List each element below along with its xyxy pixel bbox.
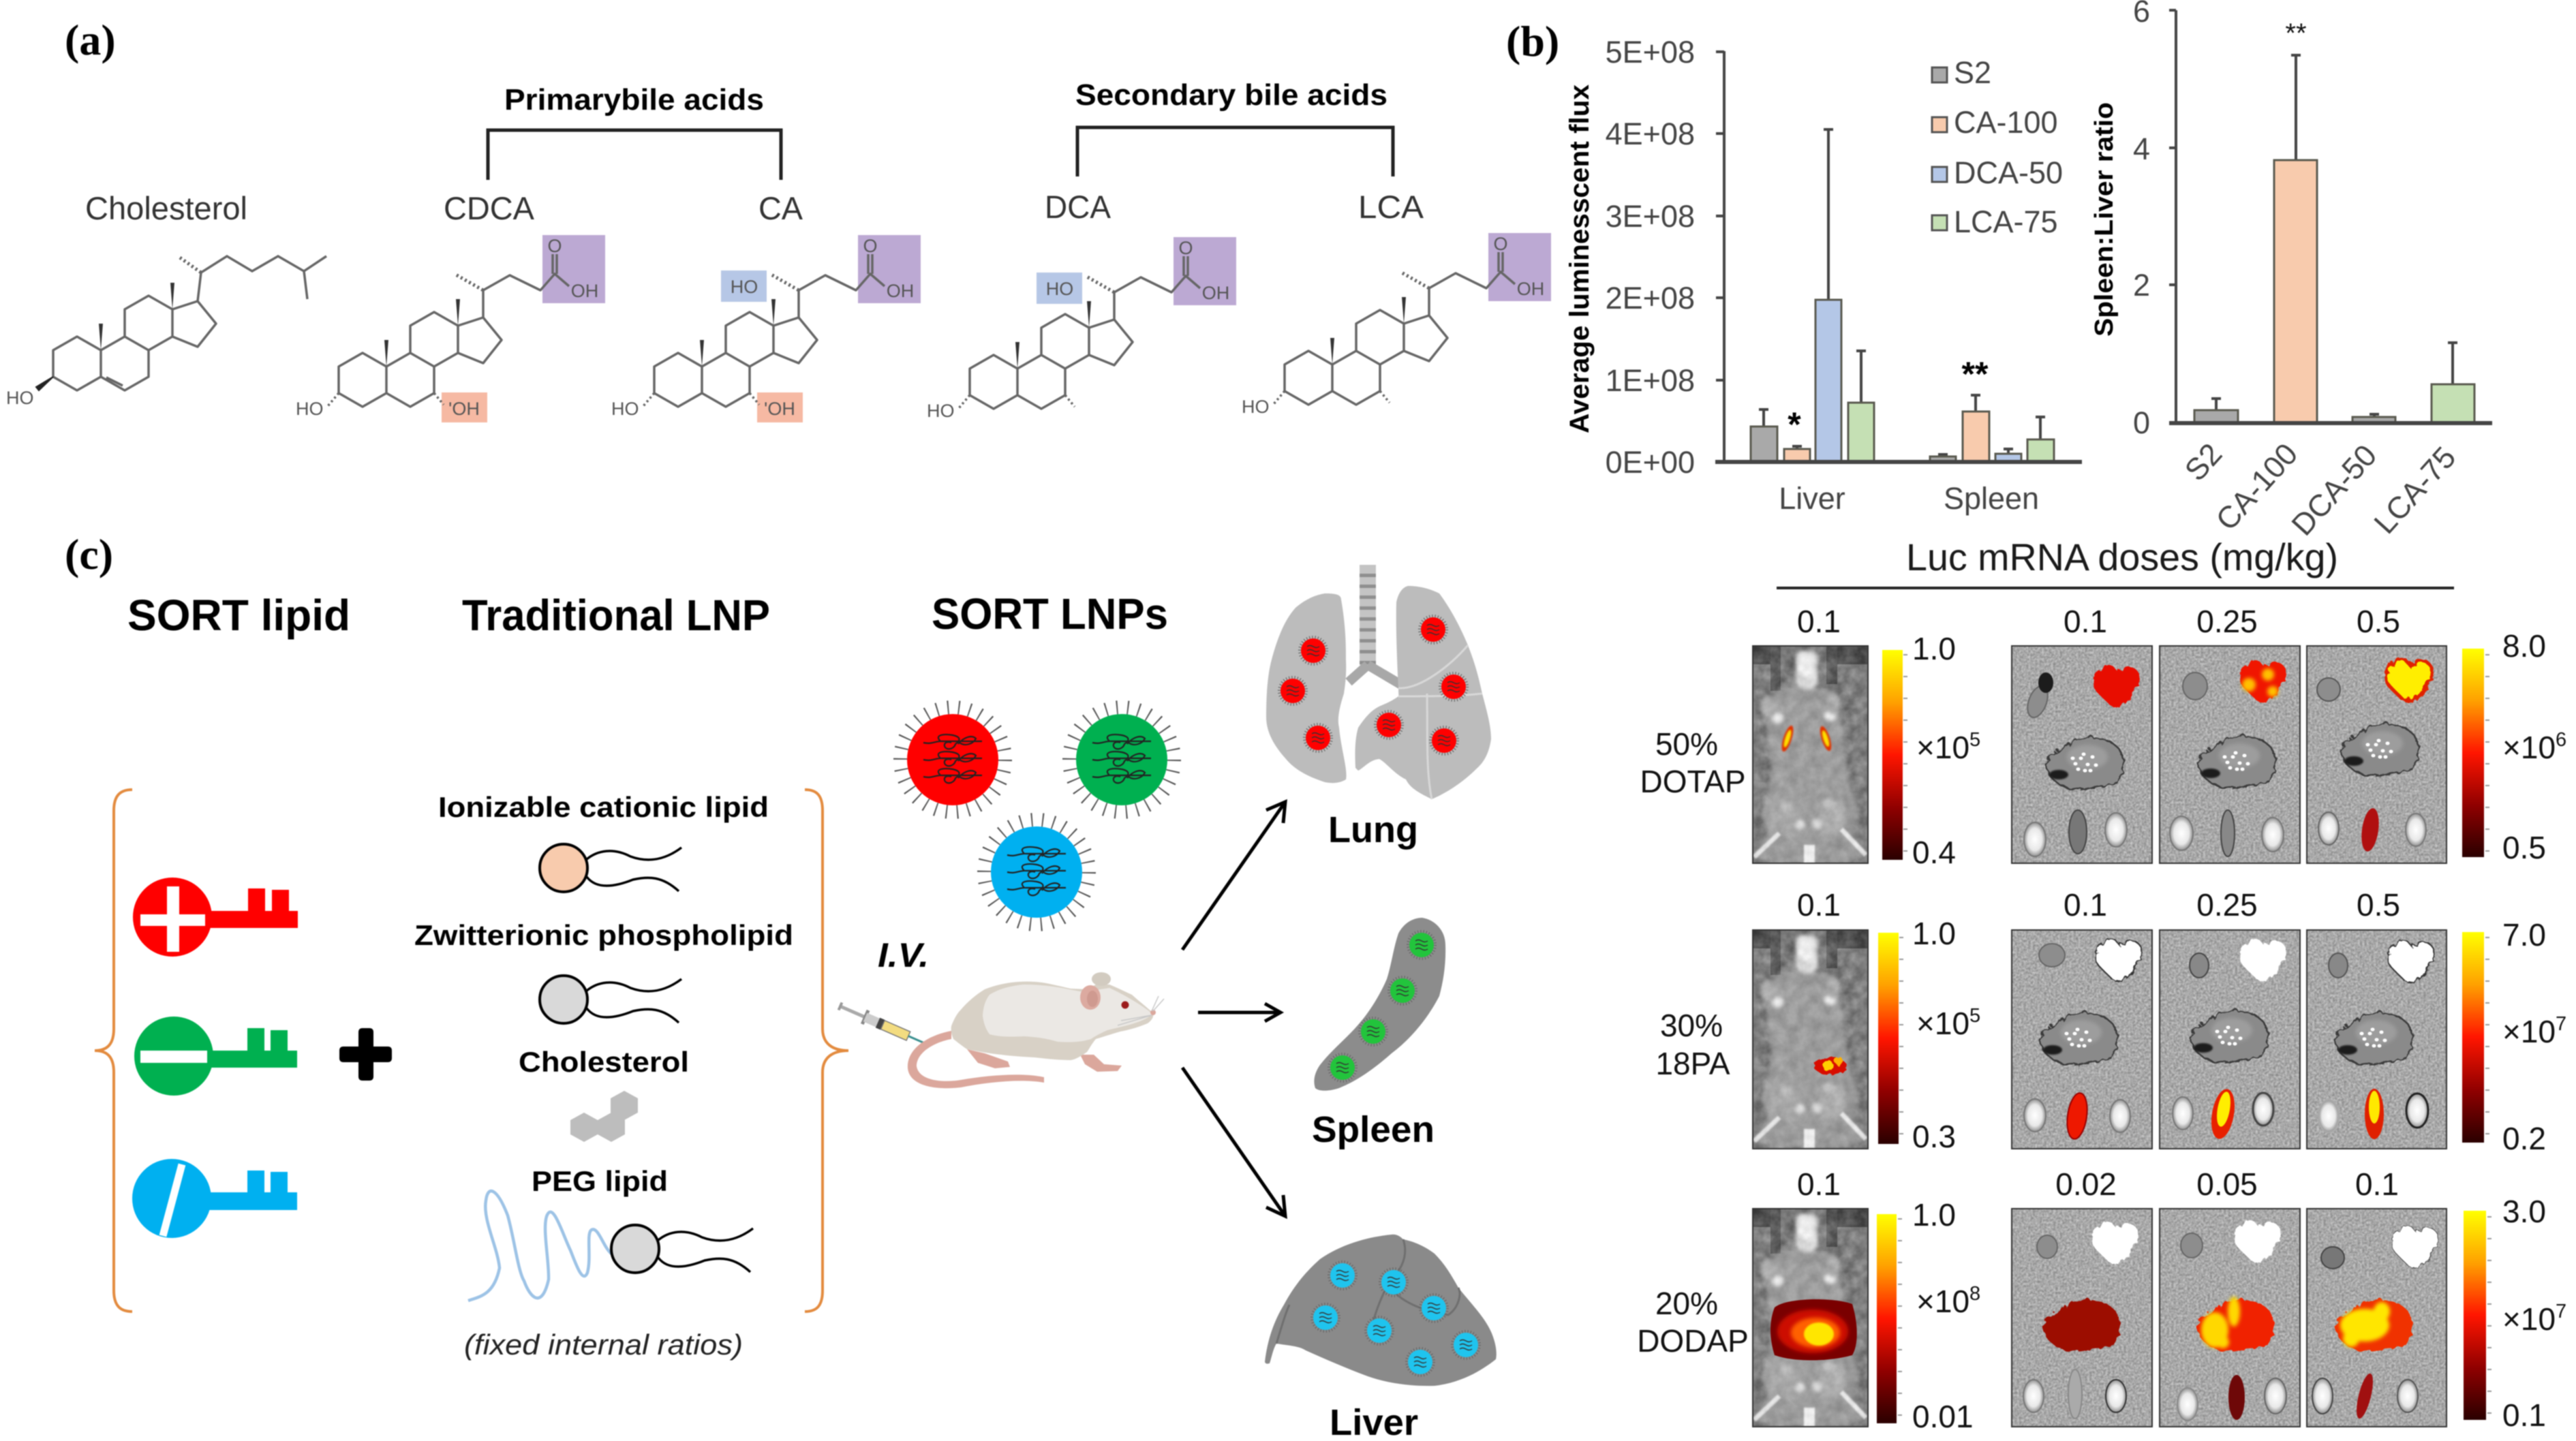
icon: red LNP (900, 707, 1005, 812)
dose labels: 0.1 (1797, 887, 1841, 923)
colorbar right: ×10 (2502, 1014, 2556, 1049)
colorbar right: ×10 (2502, 1301, 2556, 1337)
category labels: CA-100 (2209, 437, 2304, 537)
molecule: LCA: O (1493, 234, 1508, 254)
legend: DCA-50 (1954, 155, 2063, 190)
molecule: DCA: OH (1202, 283, 1229, 303)
molecule: CA: HO (731, 277, 758, 297)
label: cholesterol: Cholesterol (519, 1046, 689, 1078)
label: PEG lipid: PEG lipid (532, 1165, 668, 1197)
legend: LCA-75 (1954, 204, 2058, 239)
molecule: CA: O (863, 236, 878, 256)
whole body image (1753, 646, 1868, 864)
colorbar left: ×10 (1916, 1006, 1969, 1041)
category labels: DCA-50 (2284, 438, 2383, 542)
colorbar right: 0.1 (2502, 1397, 2546, 1433)
molecule: CDCA: HO (296, 399, 323, 419)
dose labels: 0.1 (2064, 604, 2107, 639)
dose labels (1797, 1166, 2399, 1202)
icon: PEG lipid (468, 1191, 753, 1301)
y axis ticks: 1E+08 (1606, 363, 1695, 398)
significance stars: * (1788, 405, 1801, 444)
molecule: cholesterol (6, 190, 326, 408)
organ: liver (1265, 1235, 1497, 1386)
heading: secondary bile acids: Secondary bile acids (1075, 78, 1387, 112)
category labels: LCA-75 (2367, 440, 2462, 540)
icon: ionizable lipid (540, 844, 681, 892)
colorbar right: 7 (2556, 1013, 2566, 1035)
molecule: DCA: HO (1046, 279, 1073, 299)
molecule: DCA: DCA (1045, 189, 1111, 225)
colorbar right (2462, 917, 2566, 1156)
colorbar right (2464, 1194, 2566, 1433)
organ image: dose 0.25 (2160, 646, 2300, 863)
organ image: dose 0.5 (2307, 930, 2447, 1149)
row label: DOTAP (1640, 764, 1746, 799)
organ: spleen (1314, 918, 1445, 1091)
error bars (1759, 129, 2045, 456)
molecule: cholesterol: HO (6, 388, 34, 408)
icon: blue LNP (984, 820, 1089, 925)
icon: syringe (838, 1000, 929, 1051)
icon: mouse (908, 972, 1164, 1088)
category labels (2178, 437, 2462, 542)
y axis ticks: 0 (2133, 405, 2150, 440)
row label: 20% (1655, 1286, 1718, 1321)
panel b: luminescence charts (1506, 0, 2492, 542)
row label (1637, 1286, 1749, 1359)
y axis ticks (1606, 35, 1695, 480)
panel a: bile acid structures (6, 16, 1551, 422)
note: fixed internal ratios: (fixed internal ratios) (464, 1329, 743, 1361)
body (951, 982, 1153, 1060)
panel label b: (b) (1506, 17, 1559, 65)
panel c: SORT LNP schematic (65, 530, 2566, 1441)
legend (1932, 55, 2063, 239)
colorbar right: 7.0 (2502, 917, 2546, 952)
molecule: DCA: HO (927, 401, 954, 421)
colorbar right: 0.5 (2502, 830, 2546, 865)
colorbar left: 8 (1969, 1283, 1980, 1305)
category labels (1779, 481, 2039, 516)
heading: SORT lipid: SORT lipid (127, 591, 350, 640)
colorbar left: ×10 (1916, 730, 1969, 765)
row label: DODAP (1637, 1323, 1749, 1359)
whole body image (1753, 930, 1868, 1149)
y axis ticks: 4E+08 (1606, 117, 1695, 151)
panel label c: (c) (65, 530, 113, 578)
y axis ticks (2133, 0, 2150, 440)
significance stars: ** (1962, 355, 1989, 393)
colorbar left (1878, 916, 1980, 1154)
icon: phospholipid (540, 976, 681, 1023)
left brace (95, 790, 132, 1312)
organ image: dose 0.1 (2012, 930, 2152, 1149)
molecule: CDCA: 'OH (448, 399, 480, 419)
bars: liver (1751, 300, 1874, 462)
label: I.V.: I.V. (878, 936, 929, 974)
right brace (805, 790, 848, 1312)
molecule: cholesterol: Cholesterol (85, 190, 247, 226)
arrow: to liver (1182, 1068, 1285, 1216)
whole body image (1753, 1209, 1868, 1427)
label: spleen: Spleen (1312, 1109, 1435, 1150)
bracket: primary bile acids (488, 83, 781, 180)
molecule: DCA: O (1178, 238, 1193, 258)
row label (1640, 726, 1746, 799)
organ image: dose 0.02 (2012, 1209, 2152, 1427)
dose labels (1797, 887, 2400, 923)
dose labels: 0.1 (1797, 1166, 1841, 1202)
organ image: dose 0.1 (2307, 1209, 2447, 1427)
colorbar left (1877, 1197, 1980, 1434)
bars: spleen (1930, 412, 2054, 462)
molecule: LCA: LCA (1358, 189, 1424, 225)
colorbar left: 5 (1969, 1005, 1980, 1027)
body highlight (983, 985, 1152, 1042)
colorbar left: 0.01 (1912, 1399, 1974, 1434)
icon: plus sign (339, 1028, 392, 1081)
dose labels: 0.5 (2357, 887, 2400, 923)
imaging row: 30% 18PA (1655, 887, 2566, 1156)
row label: 30% (1660, 1008, 1723, 1043)
icon: green anionic key (134, 1017, 297, 1096)
colorbar right: 3.0 (2502, 1194, 2546, 1229)
y axis title: Spleen:Liver ratio (2090, 102, 2119, 337)
bracket: secondary bile acids (1075, 78, 1393, 176)
molecule: CDCA: O (547, 236, 562, 256)
y axis ticks: 2 (2133, 268, 2150, 303)
molecule: CA (611, 190, 921, 422)
y axis ticks: 5E+08 (1606, 35, 1695, 69)
label: ionizable cationic lipid: Ionizable cationic lipid (438, 791, 769, 823)
colorbar right: ×10 (2502, 730, 2556, 765)
organ image: dose 0.25 (2160, 930, 2300, 1149)
bars (2194, 160, 2474, 423)
colorbar left: 1.0 (1912, 631, 1956, 666)
icon: red cationic key (133, 878, 298, 957)
significance stars (1788, 355, 1989, 444)
molecule: DCA (927, 189, 1236, 421)
molecule: LCA: OH (1517, 279, 1544, 299)
row label (1655, 1008, 1730, 1081)
colorbar left: 1.0 (1912, 916, 1956, 951)
colorbar left: 1.0 (1912, 1197, 1956, 1233)
y axis ticks: 2E+08 (1606, 281, 1695, 315)
panel label a: (a) (65, 16, 116, 64)
dose labels: 0.25 (2196, 604, 2258, 639)
molecule: LCA (1242, 189, 1551, 417)
imaging row: 20% DODAP (1637, 1166, 2566, 1434)
molecule: CA: 'OH (764, 399, 795, 419)
colorbar left: 0.4 (1912, 835, 1956, 870)
y axis title: Average luminesscent flux (1565, 84, 1595, 433)
category labels: Liver (1779, 481, 1845, 516)
y axis ticks: 3E+08 (1606, 199, 1695, 234)
molecule: CA: OH (887, 281, 914, 301)
category labels: Spleen (1944, 481, 2039, 516)
icon: green LNP (1069, 707, 1174, 812)
molecule: LCA: HO (1242, 397, 1269, 417)
colorbar left (1882, 631, 1980, 870)
bar chart: spleen to liver ratio (2090, 0, 2492, 542)
y axis ticks: 0E+00 (1606, 445, 1695, 480)
colorbar right: 6 (2556, 729, 2566, 751)
icon: cholesterol hexagons (570, 1091, 638, 1142)
arrow: to spleen (1198, 1004, 1281, 1021)
colorbar left: 5 (1969, 729, 1980, 751)
colorbar left: 0.3 (1912, 1119, 1956, 1154)
row label: 18PA (1655, 1046, 1730, 1081)
molecule: CDCA: OH (571, 281, 598, 301)
label: lung: Lung (1328, 809, 1418, 850)
heading: SORT LNPs: SORT LNPs (932, 589, 1168, 638)
colorbar right: 0.2 (2502, 1121, 2546, 1156)
dose labels: 0.25 (2196, 887, 2258, 923)
tail (908, 1031, 1044, 1088)
dose labels: 0.02 (2055, 1166, 2117, 1202)
colorbar right: 7 (2556, 1301, 2566, 1322)
error bars (2211, 55, 2457, 417)
organ image: dose 0.1 (2012, 646, 2152, 863)
label: zwitterionic phospholipid: Zwitterionic phospholipid (414, 919, 793, 951)
colorbar left: ×10 (1916, 1284, 1969, 1319)
bar chart: average luminescent flux (1565, 35, 2082, 516)
organ image: dose 0.5 (2307, 646, 2447, 863)
category labels: S2 (2178, 437, 2228, 488)
imaging title: Luc mRNA doses (mg/kg) (1906, 536, 2338, 578)
icon: blue neutral key (132, 1159, 297, 1238)
heading: primary bile acids: Primarybile acids (504, 83, 764, 117)
dose labels: 0.1 (2064, 887, 2107, 923)
molecule: CDCA (296, 190, 605, 422)
molecule: CA: CA (758, 190, 803, 226)
molecule: CA: HO (611, 399, 639, 419)
molecule: CDCA: CDCA (444, 190, 535, 226)
legend: CA-100 (1954, 105, 2058, 140)
dose labels: 0.05 (2196, 1166, 2258, 1202)
heading: Traditional LNP: Traditional LNP (462, 591, 770, 640)
organ image: dose 0.05 (2160, 1209, 2300, 1427)
dose labels: 0.5 (2357, 604, 2400, 639)
organ: lung (1266, 565, 1491, 799)
legend: S2 (1954, 55, 1991, 90)
row label: 50% (1655, 726, 1718, 762)
dose labels: 0.1 (1797, 604, 1841, 639)
colorbar right: 8.0 (2502, 628, 2546, 664)
significance stars: ** (2285, 18, 2307, 48)
dose labels (1797, 604, 2400, 639)
y axis ticks: 4 (2133, 131, 2150, 166)
imaging row: 50% DOTAP (1640, 604, 2566, 870)
dose labels: 0.1 (2355, 1166, 2399, 1202)
arrow: to lung (1182, 802, 1285, 950)
feet (967, 1049, 1122, 1072)
colorbar right (2462, 628, 2566, 865)
